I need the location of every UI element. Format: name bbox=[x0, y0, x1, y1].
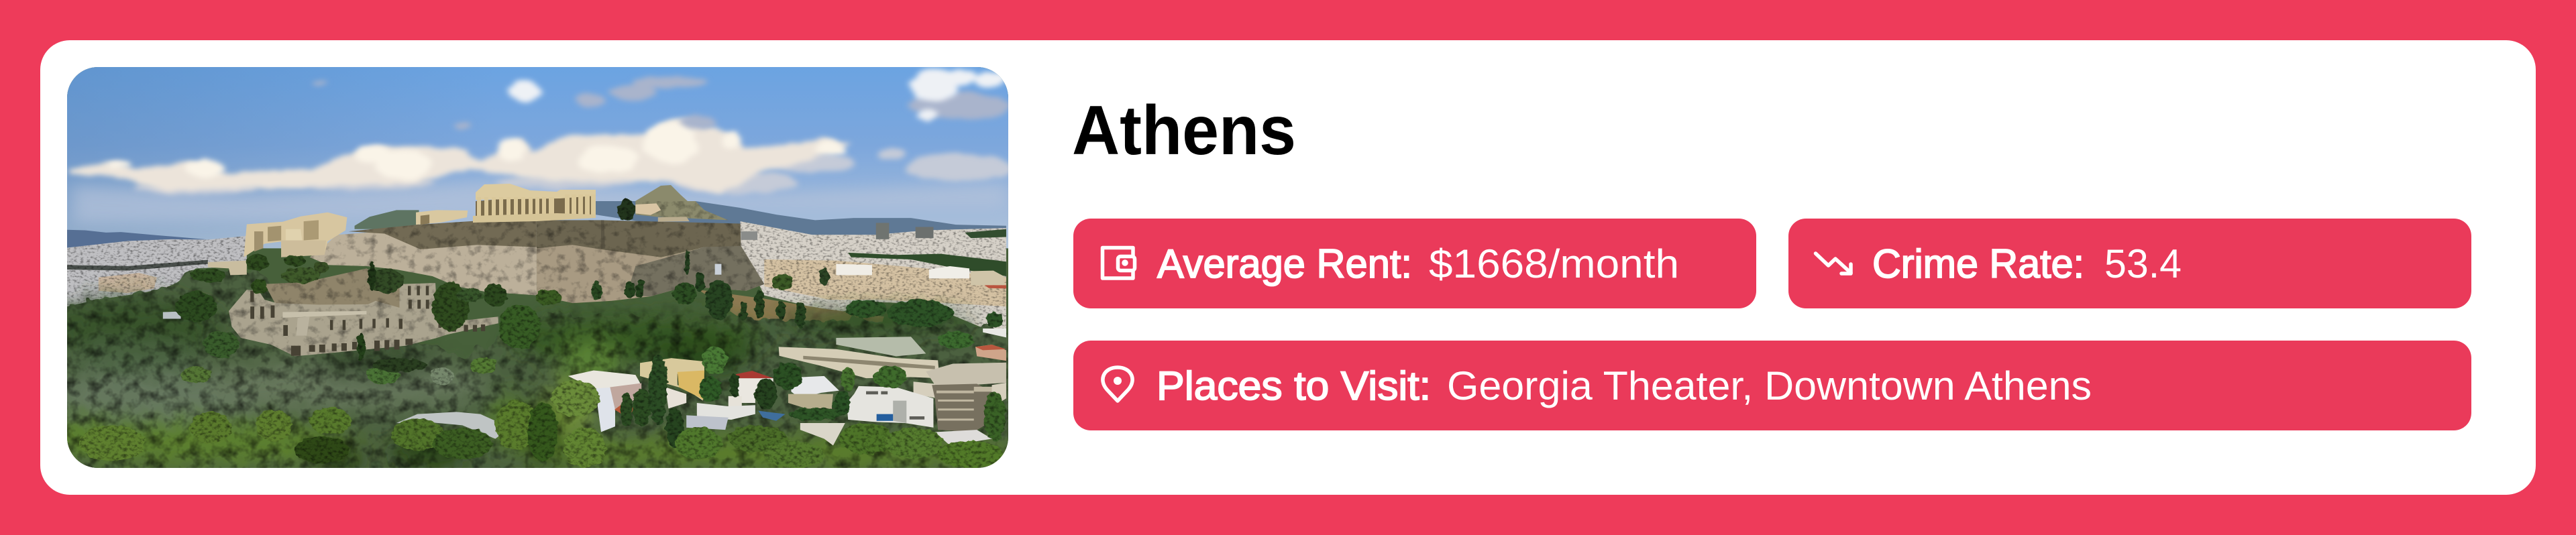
trees right side bbox=[528, 199, 1006, 468]
buildings lower right bbox=[568, 329, 1006, 445]
value: rent: $1668/month bbox=[1429, 241, 1679, 286]
Lycabettus summit bbox=[635, 185, 688, 201]
Parthenon bbox=[473, 184, 596, 223]
stat pill: average rent bbox=[1073, 219, 1756, 308]
forest bbox=[40, 268, 1026, 476]
icon: trending down bbox=[1815, 253, 1851, 274]
trees near Odeon bbox=[79, 255, 540, 463]
value: crime rate: 53.4 bbox=[2104, 241, 2182, 286]
distant hills and left city bbox=[67, 210, 419, 306]
stat pill: crime rate bbox=[1788, 219, 2471, 308]
Acropolis rock and wall bbox=[310, 219, 537, 295]
value: places: Georgia Theater, Downtown Athens bbox=[1447, 363, 2092, 408]
small building in forest bbox=[163, 312, 511, 438]
stat pill: places to visit bbox=[1073, 341, 2471, 430]
label: Places to Visit: Places to Visit: bbox=[1157, 363, 1431, 408]
right hills and city bbox=[595, 201, 1006, 340]
Lycabettus hill bbox=[635, 201, 729, 222]
sky and clouds bbox=[54, 62, 1039, 248]
heading: Athens: Athens bbox=[1072, 92, 1296, 170]
label: Crime Rate: Crime Rate: bbox=[1872, 241, 2084, 286]
hillside below Propylaea bbox=[265, 268, 405, 309]
icon: map pin bbox=[1103, 367, 1132, 401]
label: Average Rent: Average Rent: bbox=[1157, 241, 1412, 286]
photo: Acropolis of Athens bbox=[40, 62, 1039, 476]
icon: wallet bbox=[1103, 248, 1135, 278]
Odeon of Herodes Atticus bbox=[229, 283, 498, 356]
Propylaea and Erechtheion bbox=[208, 210, 468, 275]
